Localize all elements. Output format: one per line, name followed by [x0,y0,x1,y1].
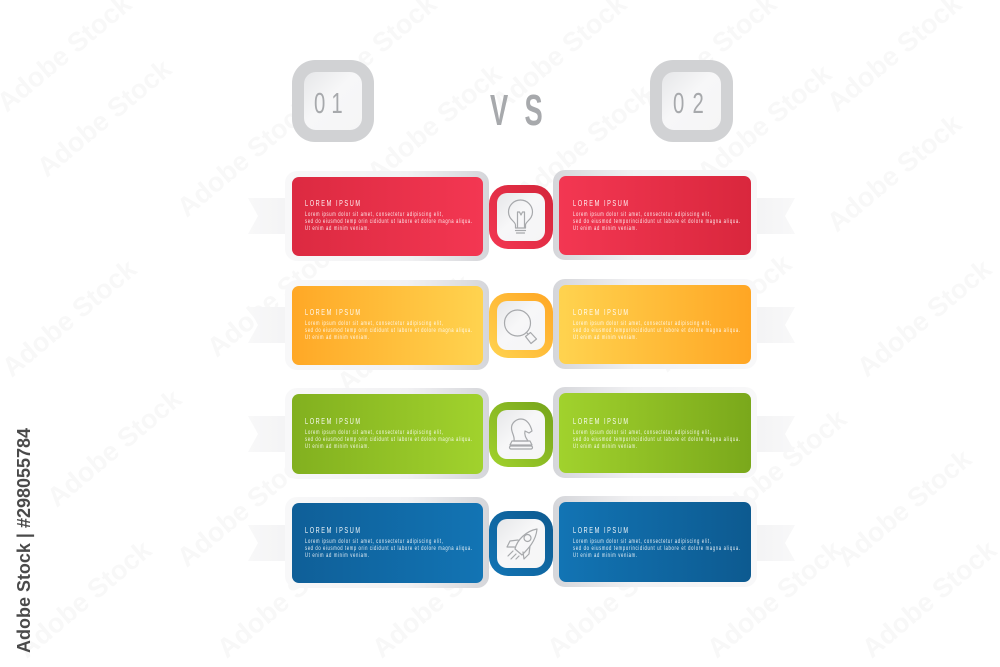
left card 2: Lorem ipsum dolor sit amet, consectetur adipiscing elit, [305,320,443,327]
left ribbon 2 [248,307,292,343]
watermark pattern: Adobe Stock [701,534,848,664]
left card 1: Ut enim ad minim veniam. [305,225,369,232]
left card 3: sed do eiusmod temp orin cididunt ut labore et dolore magna aliqua. [305,436,472,443]
left ribbon 4 [248,525,292,561]
left card 1 [285,171,489,261]
left card 4: LOREM IPSUM [305,527,360,535]
icon: rocket [489,511,553,576]
right ribbon 3 [752,416,795,452]
left card 3 [285,388,489,479]
header badge: 01: 01 [314,88,343,120]
left card 1: sed do eiusmod temp orin cididunt ut labore et dolore magna aliqua. [305,218,472,225]
right card 1 [553,170,757,260]
left card 4: Lorem ipsum dolor sit amet, consectetur adipiscing elit, [305,538,443,545]
left card 3: Ut enim ad minim veniam. [305,443,369,450]
right card 4: Ut enim ad minim veniam. [573,552,637,559]
watermark pattern: Adobe Stock [511,78,658,208]
watermark pattern: Adobe Stock [171,93,318,223]
watermark pattern: Adobe Stock [171,443,318,573]
watermark pattern: Adobe Stock [831,443,978,573]
watermark pattern: Adobe Stock [691,58,838,188]
left card 2: LOREM IPSUM [305,309,360,317]
watermark pattern: Adobe Stock [851,253,998,383]
header badge: 01 [292,60,374,142]
watermark pattern: Adobe Stock [41,383,188,513]
right card 1: LOREM IPSUM [573,200,628,208]
watermark pattern: Adobe Stock [31,53,178,183]
right card 3 [553,387,757,478]
icon: magnifying glass [489,293,553,358]
watermark pattern: Adobe Stock [0,253,143,383]
right card 4: Lorem ipsum dolor sit amet, consectetur adipiscing elit, [573,538,711,545]
header badge: 02: 02 [673,88,704,120]
watermark pattern: Adobe Stock [541,534,688,664]
right ribbon 4 [752,525,795,561]
right card 4 [553,496,757,587]
right card 4: sed do eiusmod temporincididunt ut labore et dolore magna aliqua. [573,545,740,552]
row 2: orange [248,279,795,370]
left card 3: Lorem ipsum dolor sit amet, consectetur adipiscing elit, [305,429,443,436]
left card 3: LOREM IPSUM [305,418,360,426]
right card 2: Ut enim ad minim veniam. [573,334,637,341]
right card 3: Lorem ipsum dolor sit amet, consectetur adipiscing elit, [573,429,711,436]
left card 4 [285,497,489,588]
left card 1: LOREM IPSUM [305,200,360,208]
watermark pattern: Adobe Stock [821,108,968,238]
right ribbon 2 [752,307,795,343]
left card 4: Ut enim ad minim veniam. [305,552,369,559]
row 1: red [248,170,795,261]
right card 1: Lorem ipsum dolor sit amet, consectetur adipiscing elit, [573,211,711,218]
watermark pattern: Adobe Stock [366,534,513,664]
right card 3: sed do eiusmod temporincididunt ut labore et dolore magna aliqua. [573,436,740,443]
right card 1: Ut enim ad minim veniam. [573,225,637,232]
left card 1: Lorem ipsum dolor sit amet, consectetur adipiscing elit, [305,211,443,218]
right ribbon 1 [752,198,795,234]
right card 2 [553,279,757,369]
watermark pattern: Adobe Stock [331,268,478,398]
right card 4: LOREM IPSUM [573,527,628,535]
watermark pattern: Adobe Stock [11,534,158,664]
left ribbon 3 [248,416,292,452]
heading: VS: VS [490,85,543,135]
left card 4: sed do eiusmod temp orin cididunt ut labore et dolore magna aliqua. [305,545,472,552]
watermark pattern: Adobe Stock [706,403,853,533]
watermark pattern: Adobe Stock [201,233,348,363]
watermark pattern: Adobe Stock [211,534,358,664]
icon: light bulb [489,185,553,249]
left card 2: sed do eiusmod temp orin cididunt ut labore et dolore magna aliqua. [305,327,472,334]
icon: chess knight [489,402,553,467]
header badge: 02 [650,60,733,142]
stock id side label: Adobe Stock | #298055784 [13,427,34,653]
right card 3: LOREM IPSUM [573,418,628,426]
right card 2: sed do eiusmod temporincididunt ut labore et dolore magna aliqua. [573,327,740,334]
watermark pattern: Adobe Stock [651,248,798,378]
right card 2: Lorem ipsum dolor sit amet, consectetur adipiscing elit, [573,320,711,327]
right card 3: Ut enim ad minim veniam. [573,443,637,450]
watermark pattern: Adobe Stock [361,58,508,188]
right card 2: LOREM IPSUM [573,309,628,317]
row 4: blue [248,496,795,588]
left card 2: Ut enim ad minim veniam. [305,334,369,341]
left ribbon 1 [248,198,292,234]
row 3: green [248,387,795,479]
right card 1: sed do eiusmod temporincididunt ut labore et dolore magna aliqua. [573,218,740,225]
left card 2 [285,280,489,370]
watermark pattern: Adobe Stock [856,534,1000,664]
